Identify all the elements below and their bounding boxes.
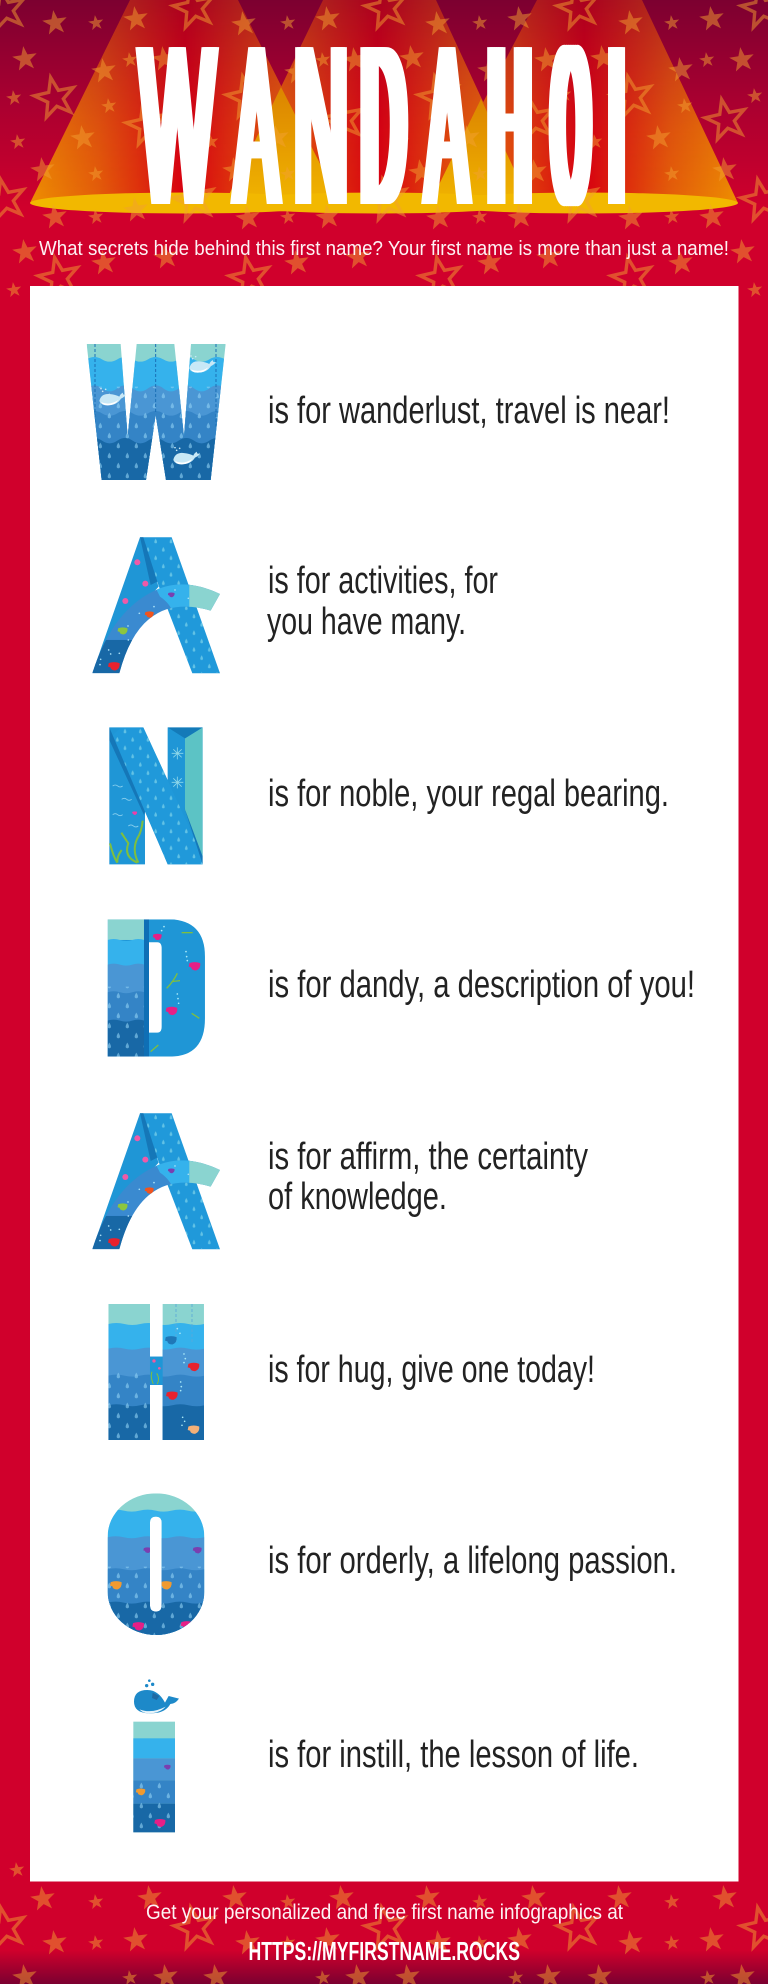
icon: letter A	[90, 1113, 223, 1253]
letter A row	[90, 537, 498, 677]
stem	[133, 1722, 175, 1832]
whale	[134, 1679, 179, 1713]
title: I	[606, 0, 627, 253]
icon: letter A	[90, 537, 223, 677]
footer url: HTTPS://MYFIRSTNAME.ROCKS	[248, 1936, 520, 1966]
text: A lines 2: of knowledge.	[268, 1176, 447, 1218]
subtitle: What secrets hide behind this first name? Your first name is more than just a name!	[39, 238, 729, 260]
text: I line: is for instill, the lesson of life.	[268, 1734, 639, 1776]
title	[135, 0, 627, 253]
letter N row	[109, 727, 669, 864]
text: A lines	[267, 560, 498, 643]
text: A lines 2	[268, 1136, 588, 1218]
panel: letters	[30, 286, 738, 1882]
icon: letter H	[108, 1304, 204, 1440]
footer text: Get your personalized and free first name infographics at	[146, 1901, 623, 1924]
title: A	[426, 0, 468, 253]
letter W row	[87, 344, 670, 480]
title: D	[362, 0, 404, 253]
title: N	[294, 0, 348, 253]
letter A row 2	[90, 1113, 588, 1253]
title: O	[553, 0, 588, 253]
letter H row	[108, 1304, 595, 1440]
letter I row	[133, 1679, 639, 1832]
text: A lines: is for activities, for	[268, 560, 498, 602]
letter D row	[108, 919, 695, 1057]
icon: letter i with whale	[133, 1679, 179, 1832]
icon: letter O	[108, 1493, 204, 1635]
title: A	[235, 0, 278, 253]
text: A lines 2: is for affirm, the certainty	[268, 1136, 588, 1178]
title: W	[140, 0, 214, 253]
spotlights	[30, 0, 738, 214]
text: H line: is for hug, give one today!	[268, 1349, 595, 1391]
icon: letter W	[87, 344, 226, 480]
icon: letter D	[108, 919, 205, 1057]
text: A lines: you have many.	[267, 601, 466, 643]
title: H	[489, 0, 530, 253]
icon: letter N	[109, 727, 203, 864]
letter O row	[108, 1493, 677, 1635]
